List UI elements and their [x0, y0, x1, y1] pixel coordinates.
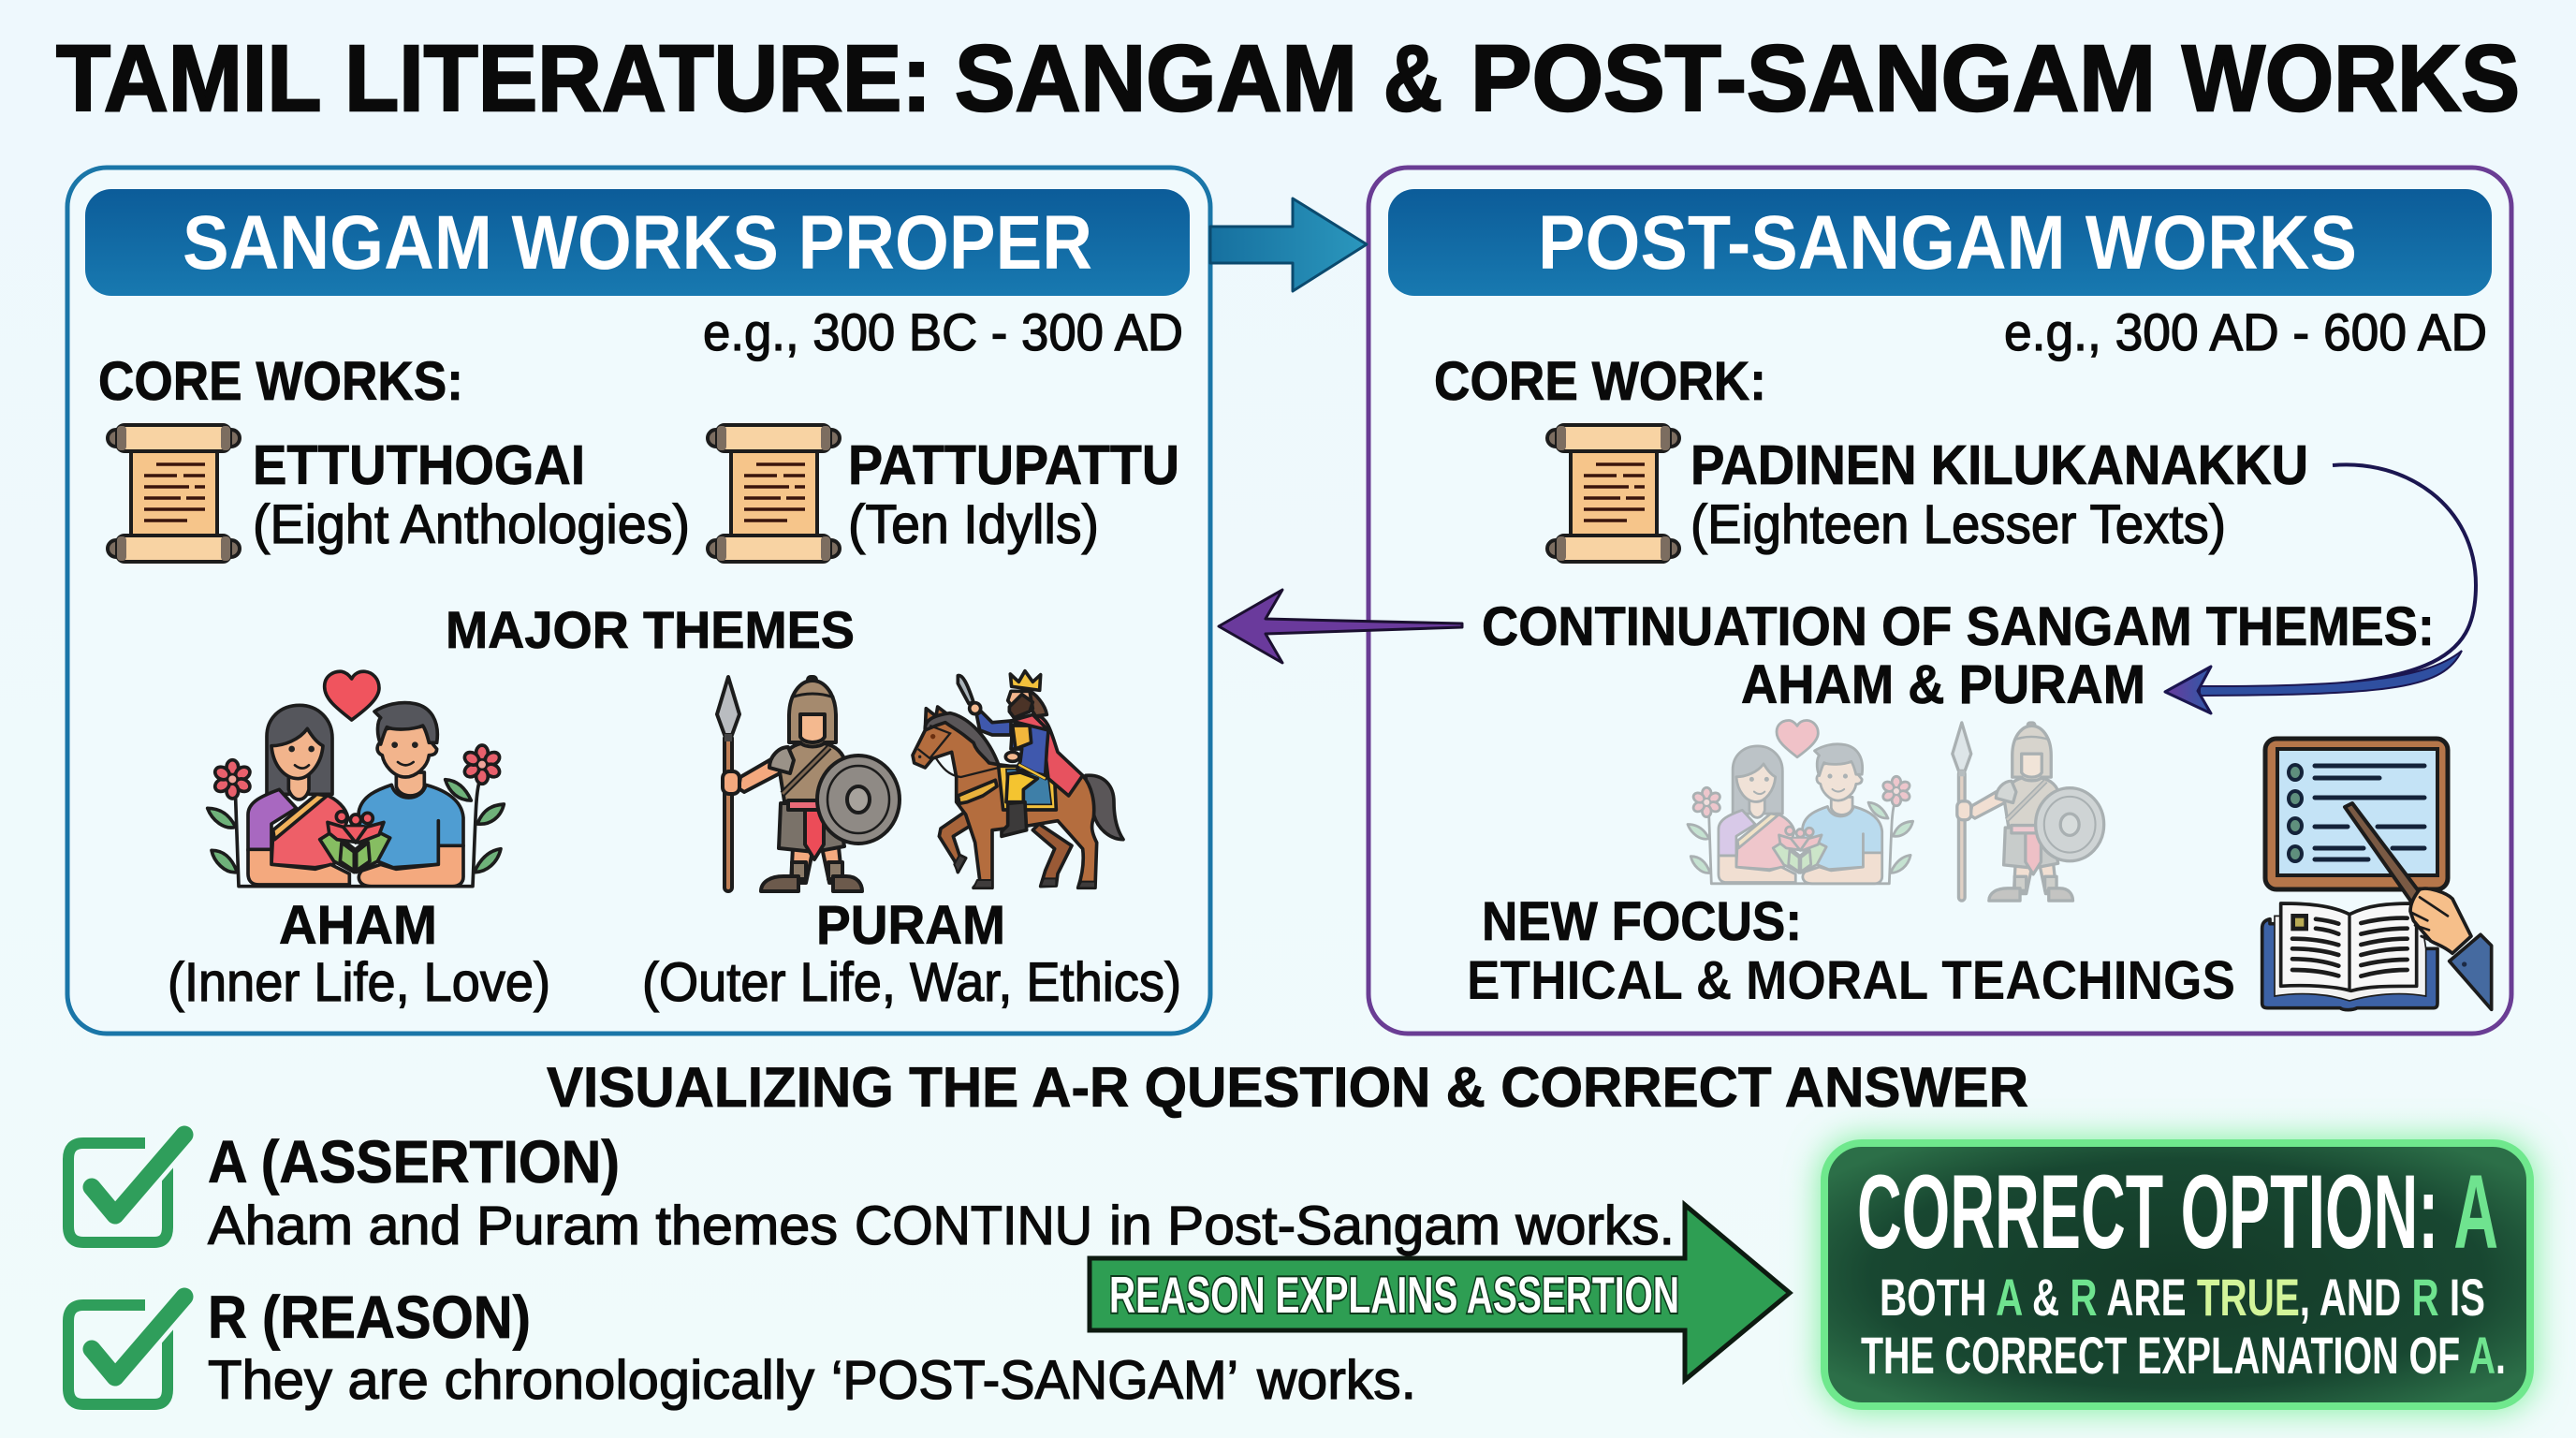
icon: open book [2262, 903, 2437, 1010]
title: SANGAM [955, 26, 1357, 131]
panel header: Sangam works proper: SANGAM WORKS PROPER [183, 200, 1092, 286]
period label: e.g., 300 BC - 300 AD [703, 302, 1183, 361]
arrow: reason explains assertion: REASON EXPLAINS ASSERTION [1109, 1266, 1679, 1324]
panel: Sangam works proper [67, 168, 1210, 1034]
panel header: post-Sangam works: POST-SANGAM WORKS [1538, 200, 2357, 286]
panel header: post-Sangam works [1388, 189, 2492, 296]
work: Ettuthogai: ETTUTHOGAI [253, 434, 585, 496]
heading: A-R question: VISUALIZING THE A-R QUESTION & CORRECT ANSWER [547, 1056, 2028, 1119]
icon: pointing hand [2345, 803, 2492, 1009]
heading: core work: CORE WORK: [1434, 351, 1766, 412]
icon: scroll Padinen Kilukanakku [1547, 425, 1679, 562]
icon: king on horse (Puram) [913, 671, 1123, 888]
icon: reason checkbox [68, 1297, 184, 1404]
text: reason: ‘POST-SANGAM’ [831, 1350, 1238, 1411]
title [56, 26, 2520, 131]
work: Padinen Kilukanakku: PADINEN KILUKANAKKU [1690, 434, 2308, 496]
text: reason: R (REASON) [208, 1284, 531, 1351]
text: assertion [208, 1128, 1675, 1256]
theme label: Aham [168, 895, 550, 1013]
theme label: Aham: (Inner Life, Love) [168, 952, 550, 1013]
text: assertion: A (ASSERTION) [208, 1128, 620, 1196]
work: Pattupattu: PATTUPATTU [848, 434, 1179, 496]
text: continuation of Sangam themes [1482, 596, 2435, 715]
icon: warrior (Puram) [717, 677, 900, 891]
theme label: Puram: PURAM [816, 895, 1005, 956]
period label: e.g., 300 AD - 600 AD [2004, 302, 2487, 361]
text: reason: works. [1256, 1350, 1416, 1411]
work: Ettuthogai [253, 434, 690, 555]
title: WORKS [2182, 26, 2520, 131]
theme label: Aham: AHAM [279, 895, 437, 956]
icon: assertion checkbox [68, 1135, 184, 1242]
icon: faded couple [1688, 720, 1913, 884]
arrow: reason explains assertion [1090, 1205, 1790, 1380]
panel: post-Sangam works [1368, 168, 2511, 1034]
icon: scroll Ettuthogai [108, 425, 240, 562]
text: reason: They are chronologically [208, 1350, 814, 1411]
text: continuation of Sangam themes: AHAM & PURAM [1741, 654, 2145, 715]
text: continuation of Sangam themes: CONTINUATION OF SANGAM THEMES: [1482, 596, 2435, 657]
icon: faded warrior [1953, 723, 2104, 901]
title: TAMIL LITERATURE: [56, 26, 931, 131]
theme label: Puram [642, 895, 1181, 1013]
heading: major themes: MAJOR THEMES [446, 600, 855, 659]
arrow: continuation back to Sangam [1219, 590, 1462, 663]
curved arrow: to Aham and Puram [2165, 464, 2476, 713]
text: new focus: NEW FOCUS: [1482, 891, 1802, 952]
text: reason [208, 1284, 1416, 1411]
text: new focus [1467, 891, 2235, 1011]
work: Padinen Kilukanakku [1690, 434, 2308, 555]
work: Padinen Kilukanakku: (Eighteen Lesser Texts) [1690, 494, 2226, 555]
work: Ettuthogai: (Eight Anthologies) [253, 494, 690, 555]
work: Pattupattu: (Ten Idylls) [848, 494, 1099, 555]
callout: correct option [1821, 1139, 2534, 1410]
callout: correct option: BOTH A & R ARE TRUE, AND R IS [1880, 1268, 2485, 1327]
text: assertion: CONTINU [855, 1196, 1092, 1256]
heading: core works: CORE WORKS: [98, 351, 463, 412]
text: new focus: ETHICAL & MORAL TEACHINGS [1467, 950, 2235, 1011]
title: & [1383, 26, 1442, 131]
text: assertion: Aham and Puram themes [208, 1196, 838, 1256]
arrow: Sangam to post-Sangam [1210, 198, 1367, 291]
title: POST-SANGAM [1471, 26, 2156, 131]
text: assertion: in Post-Sangam works. [1109, 1196, 1675, 1256]
icon: couple (Aham) [208, 671, 504, 887]
icon: lesson board [2265, 739, 2448, 889]
work: Pattupattu [848, 434, 1179, 555]
icon: scroll Pattupattu [708, 425, 840, 562]
theme label: Puram: (Outer Life, War, Ethics) [642, 952, 1181, 1013]
